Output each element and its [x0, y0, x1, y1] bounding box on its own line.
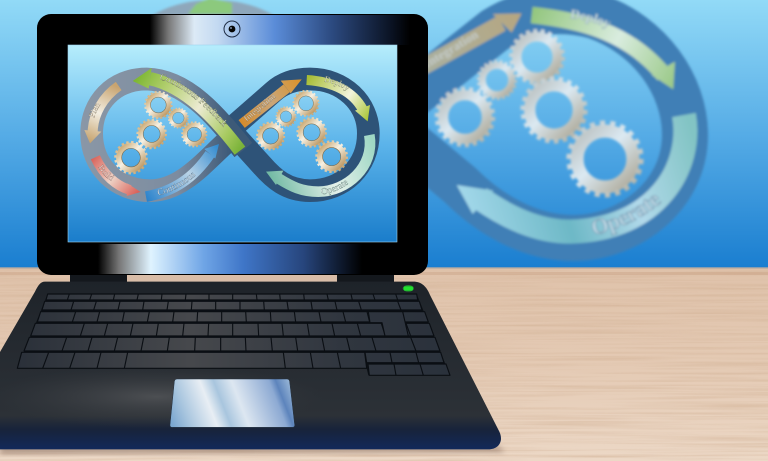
key row 6 with space bar [17, 352, 367, 368]
arrow: Integration: Integration [243, 94, 276, 122]
enter key [368, 312, 408, 336]
wall arrow: Operate: Operate [592, 194, 662, 236]
arrow keys upper [365, 352, 444, 363]
wall arrow: Integration: Integration [428, 32, 480, 68]
ring band [400, 11, 685, 238]
hinges [70, 270, 394, 288]
keyboard well [17, 294, 450, 375]
arrow: Continuous Feedback: Continuous Feedback [160, 74, 227, 128]
arrow: Operate [266, 134, 376, 197]
laptop lid [37, 14, 428, 275]
dark right loop band [220, 79, 368, 191]
left loop fragment behind the laptop [135, 0, 291, 84]
key row 1 [46, 294, 418, 300]
blurred enlarged infinity loop on the wall [152, 0, 709, 262]
arrow: Plan [84, 82, 122, 144]
key row 5 [24, 337, 440, 351]
laptop shadow on desk [0, 446, 505, 454]
arrow keys lower [368, 364, 450, 375]
wooden desk [0, 267, 768, 461]
key row 3 [37, 312, 428, 322]
arrow: Continuous: Continuous [158, 172, 196, 196]
wall arrow: Deploy: Deploy [570, 8, 612, 30]
laptop base [0, 282, 501, 449]
infinity diagram on screen [80, 68, 380, 202]
arrow: Deploy: Deploy [324, 76, 350, 91]
arrow: Continuous [145, 144, 219, 202]
bottom bezel sheen [98, 244, 362, 274]
wall gears [437, 31, 641, 195]
grey left loop band [92, 79, 243, 191]
laptop [0, 14, 501, 449]
wall arrow: Operate [456, 112, 699, 245]
webcam [224, 21, 240, 37]
gears right group [257, 91, 347, 172]
arrow: Deploy [306, 75, 370, 122]
arrow: Plan: Plan [88, 103, 100, 118]
key row 2 [42, 301, 422, 310]
key row 4 [31, 323, 434, 336]
trackpad [170, 379, 295, 427]
wall arrow: Integration [428, 11, 523, 76]
arrow: Build: Build [98, 164, 114, 182]
screen [68, 45, 397, 242]
arrow: Build [90, 155, 140, 196]
wall arrow: Deploy [529, 5, 677, 90]
gears left group [115, 92, 206, 173]
arrow: Operate: Operate [321, 180, 348, 196]
arrow: Integration [238, 79, 302, 128]
keyboard [17, 294, 450, 375]
blue wall background [0, 0, 768, 268]
top bezel sheen [150, 15, 412, 45]
arrow: Continuous Feedback [132, 68, 246, 155]
power LED [403, 285, 414, 292]
